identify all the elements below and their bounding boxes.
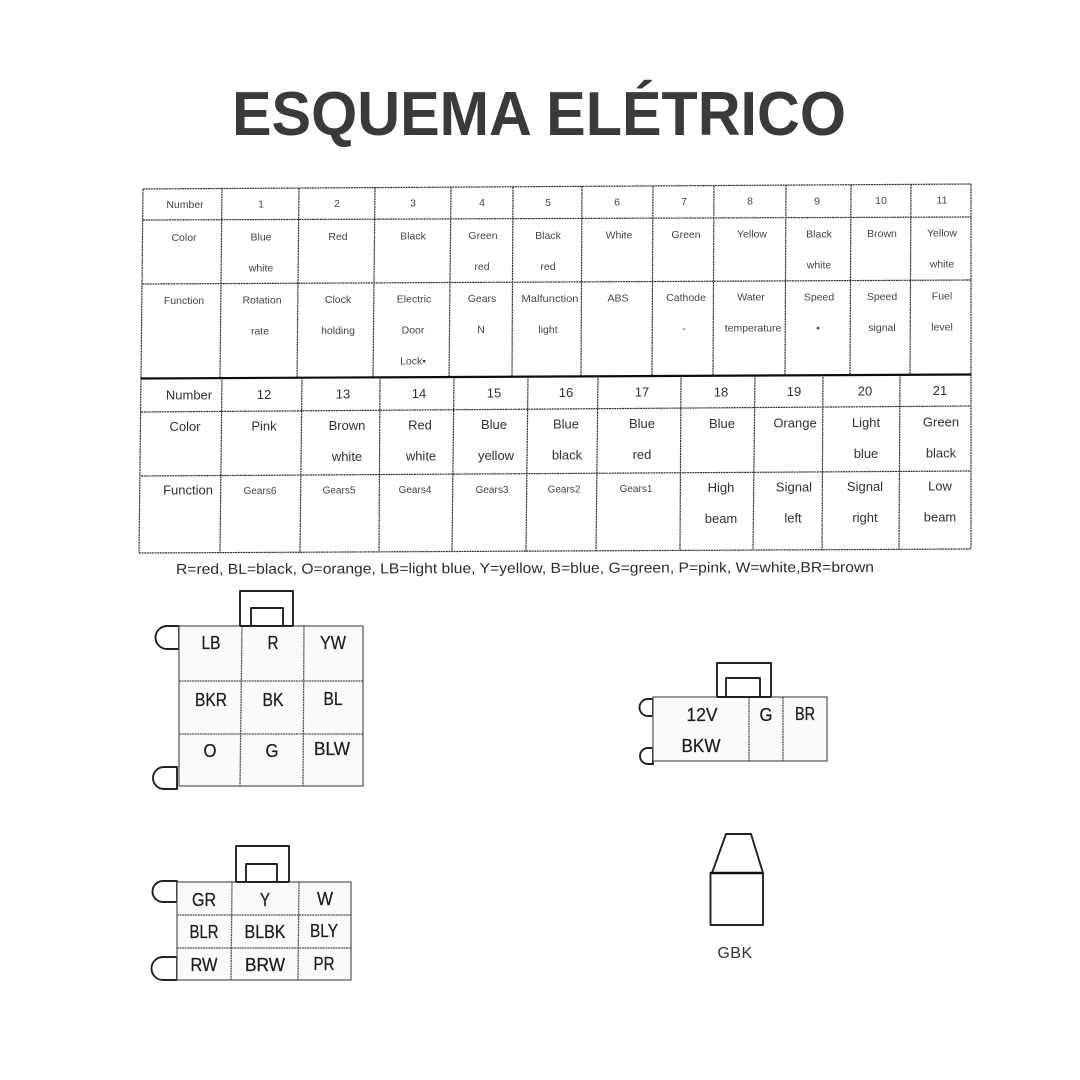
row: number 1-11: 4	[479, 197, 485, 209]
pin labels	[195, 633, 350, 761]
row: number 1-11: 11	[937, 195, 948, 207]
gears labels: Gears5	[323, 486, 356, 496]
row: color 1-11: Blue	[250, 231, 272, 243]
row: number 12-21: 18	[714, 384, 728, 399]
row: number 1-11: 5	[545, 197, 551, 209]
row: number 12-21: 20	[858, 384, 872, 398]
row: color 1-11: white	[806, 259, 831, 271]
row: color 1-11: white	[929, 259, 954, 271]
row: number 1-11: 3	[410, 198, 416, 210]
row: color 1-11: White	[606, 229, 633, 241]
row: color 12-21: Orange	[773, 415, 817, 430]
row: function 1-11: Lock•	[400, 356, 426, 368]
row: color 1-11	[171, 228, 957, 274]
pin labels: YW	[320, 633, 346, 653]
row: function 12-21: left	[784, 510, 802, 525]
row: function 1-11: Gears	[468, 293, 496, 305]
row: color 1-11: white	[248, 262, 273, 274]
gears labels: Gears2	[548, 484, 581, 495]
title: ESQUEMA ELÉTRICO	[232, 80, 846, 149]
row: number 12-21: 12	[257, 387, 271, 402]
pin labels: BKW	[682, 736, 720, 756]
row: color 12-21: Color	[169, 419, 201, 434]
gears labels: Gears4	[399, 485, 432, 496]
row: function 1-11: Cathode	[666, 292, 706, 304]
pin labels: RW	[190, 955, 218, 975]
pin labels: PR	[314, 954, 334, 974]
row: function 1-11: Electric	[397, 294, 431, 306]
pin labels: BLY	[310, 921, 338, 941]
pin labels: BKR	[195, 690, 227, 710]
row: color 1-11: Yellow	[737, 229, 767, 241]
pin labels: R	[268, 633, 278, 653]
row: color 12-21: Light	[852, 415, 880, 430]
pin labels	[190, 889, 338, 975]
row: function 1-11: •	[816, 322, 820, 334]
pin labels: G	[266, 741, 278, 761]
row: color 12-21: Green	[923, 415, 959, 430]
row: number 12-21: 14	[412, 386, 426, 401]
row: function 12-21: Signal	[847, 479, 883, 494]
row: function 1-11: level	[931, 322, 953, 334]
pin labels: BRW	[245, 955, 285, 975]
row: color 12-21: black	[552, 448, 583, 463]
row: color 1-11: Black	[535, 230, 562, 242]
row: color 1-11: Green	[468, 230, 498, 242]
row: function 1-11: Function	[164, 295, 204, 307]
row: function 1-11: Door	[402, 324, 425, 336]
row: number 1-11: Number	[166, 199, 204, 211]
row: function 1-11: Malfunction	[522, 293, 579, 305]
row: number 1-11: 6	[614, 196, 620, 208]
row: color 12-21: Red	[408, 418, 432, 432]
row: color 1-11: Green	[671, 229, 701, 241]
pin labels: 12V	[686, 705, 718, 725]
row: function 1-11: Rotation	[242, 294, 282, 306]
row: function 1-11: light	[538, 324, 558, 336]
pin labels: W	[317, 889, 333, 909]
pin labels: G	[760, 705, 772, 725]
row: function 1-11: -	[682, 323, 686, 335]
gears labels: Gears3	[476, 485, 509, 496]
row: color 1-11: Brown	[867, 228, 897, 240]
row: color 12-21: Blue	[553, 417, 579, 432]
connector: 9-pin lower left	[152, 846, 351, 980]
row: color 12-21: white	[331, 449, 362, 464]
row: number 1-11: 1	[258, 198, 264, 210]
row: number 1-11: 2	[334, 198, 340, 210]
row: function 1-11: Fuel	[932, 291, 952, 303]
row: function 1-11: temperature	[725, 323, 781, 335]
row: color 12-21: red	[633, 447, 651, 462]
row: number 1-11: 10	[875, 195, 887, 207]
row: color 1-11: red	[474, 261, 490, 273]
GBK label: GBK	[717, 945, 753, 962]
row: color 12-21: Pink	[251, 418, 277, 433]
row: number 12-21: 13	[336, 386, 350, 401]
row: function 1-11: Water	[737, 292, 765, 304]
row: function 1-11: Clock	[325, 294, 352, 306]
row: color 12-21: Blue	[481, 417, 507, 432]
row: number 12-21: 15	[487, 386, 501, 401]
pin labels: BK	[262, 690, 284, 710]
row: color 1-11: Black	[806, 228, 833, 240]
row: function 12-21	[163, 479, 956, 526]
row: function 1-11: signal	[868, 322, 896, 334]
row: color 1-11: Color	[171, 232, 197, 244]
connector: GBK	[710, 834, 763, 962]
table: pins 12 to 21	[139, 374, 971, 553]
row: color 12-21: Brown	[329, 418, 365, 433]
row: function 1-11: rate	[251, 325, 269, 337]
row: number 1-11: 8	[747, 196, 753, 208]
legend: colour abbreviations: R=red, BL=black, O=orange, LB=light blue, Y=yellow, B=blue, G=green, P=pink, W=white,BR=brown	[176, 560, 874, 578]
row: color 1-11: red	[540, 261, 556, 273]
pin labels: BR	[795, 704, 815, 724]
gears labels: Gears6	[244, 486, 277, 497]
row: function 12-21: Low	[928, 479, 953, 494]
pin labels: O	[204, 741, 216, 761]
row: function 1-11: Speed	[804, 291, 834, 303]
row: function 12-21: Signal	[776, 479, 812, 494]
row: number 12-21	[166, 383, 947, 402]
pin labels: GR	[192, 890, 216, 910]
row: function 12-21: High	[708, 480, 734, 495]
row: function 12-21: right	[852, 510, 878, 525]
row: color 12-21: blue	[854, 446, 878, 461]
connector: 12V right	[640, 663, 827, 764]
row: number 1-11: 9	[814, 195, 820, 207]
row: function 1-11: ABS	[607, 292, 629, 304]
row: color 12-21: Blue	[629, 416, 655, 431]
row: number 12-21: 17	[635, 385, 649, 400]
row: color 12-21	[169, 415, 959, 464]
row: function 12-21: Function	[163, 483, 213, 498]
table: pins 1 to 11	[141, 184, 971, 378]
row: number 1-11	[166, 195, 948, 211]
row: color 12-21: white	[405, 448, 436, 464]
row: number 12-21: 16	[559, 385, 573, 400]
gears labels	[244, 484, 653, 497]
row: color 12-21: Blue	[709, 416, 735, 431]
row: number 12-21: 19	[787, 384, 801, 399]
pin labels: BLR	[190, 922, 219, 942]
row: function 12-21: beam	[705, 511, 737, 526]
row: function 1-11: Speed	[867, 291, 897, 303]
row: function 1-11: N	[477, 324, 485, 336]
pin labels: BL	[324, 689, 342, 709]
gears labels: Gears1	[620, 484, 653, 495]
row: number 12-21: Number	[166, 388, 213, 402]
row: function 1-11	[164, 291, 953, 368]
pin labels: LB	[202, 633, 220, 653]
row: function 12-21: beam	[924, 510, 956, 525]
row: color 1-11: Red	[328, 231, 348, 243]
row: color 12-21: black	[926, 446, 957, 461]
row: function 1-11: holding	[321, 325, 355, 337]
pin labels	[682, 704, 815, 756]
pin labels: BLW	[314, 739, 350, 759]
row: color 1-11: Yellow	[927, 228, 957, 240]
pin labels: Y	[260, 890, 270, 910]
row: number 1-11: 7	[681, 196, 687, 208]
pin labels: BLBK	[244, 922, 286, 942]
connector: 9-pin upper left	[153, 591, 363, 789]
row: color 1-11: Black	[400, 230, 427, 242]
row: color 12-21: yellow	[478, 448, 515, 463]
row: number 12-21: 21	[933, 383, 947, 398]
